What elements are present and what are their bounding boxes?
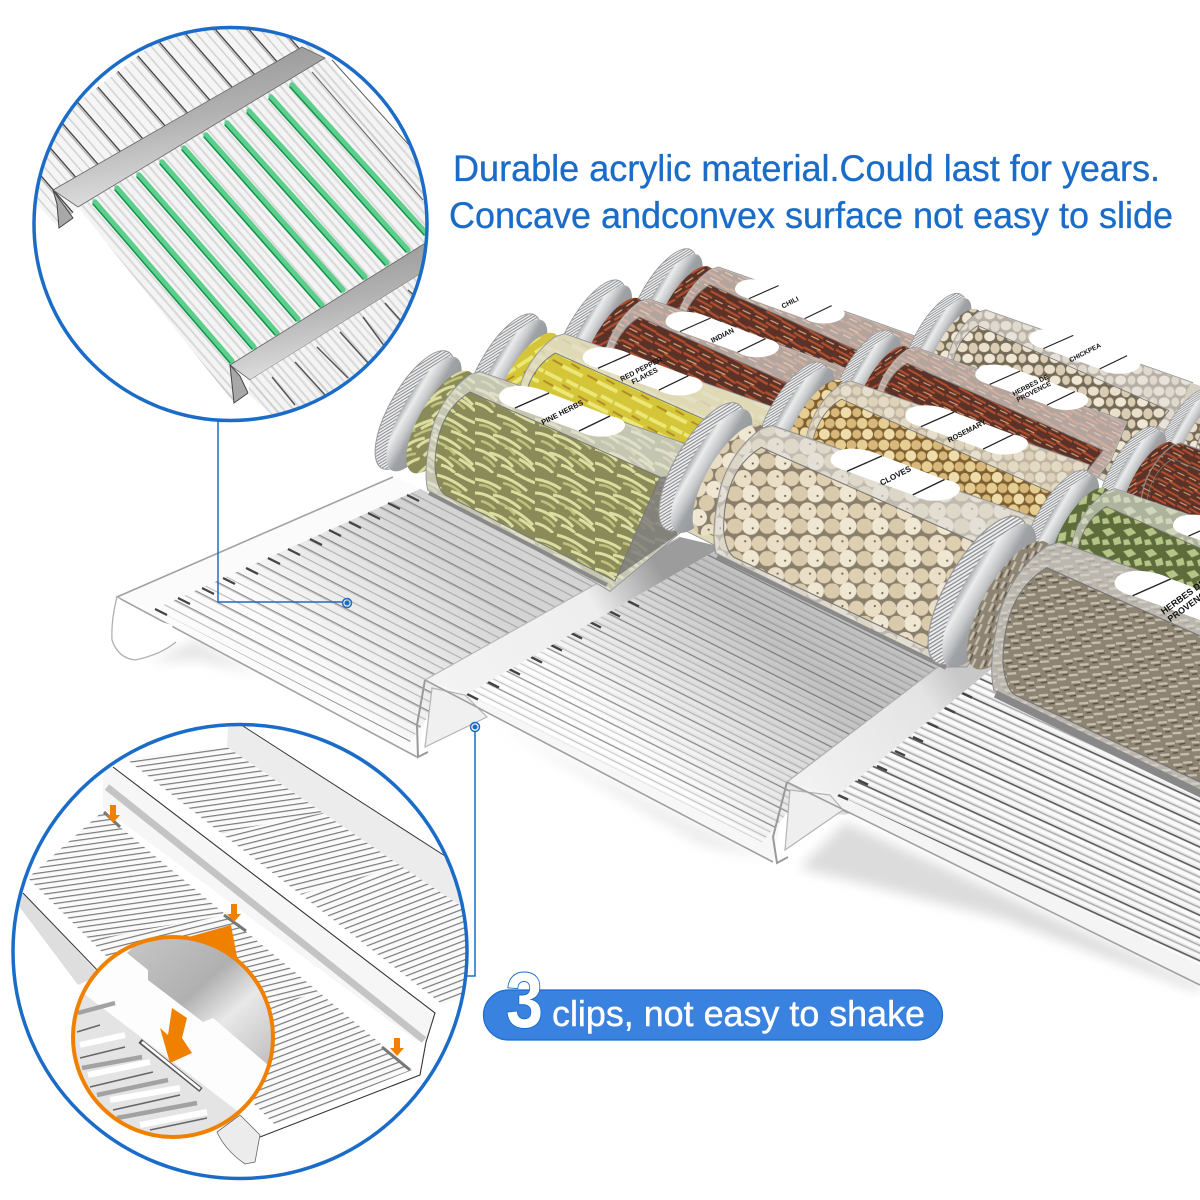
jar: yellow spice: FLAKES [630, 366, 659, 386]
panel: stepped acrylic shelf trays [112, 477, 1200, 992]
tray 1 [112, 477, 720, 757]
jar: white chickpeas back [892, 285, 1200, 484]
callout pill: 3 clips [484, 956, 942, 1044]
jar: chili, back left [614, 239, 949, 461]
pill text: clips, not easy to shake [552, 993, 925, 1034]
jar: pearls front: CLOVES [879, 464, 913, 488]
big orange arrow [160, 1008, 192, 1063]
lower tray left riser [18, 893, 100, 985]
upper tray ribs [125, 747, 323, 833]
jar: white chickpeas back: CHICKPEA [1068, 342, 1102, 364]
orange zoom pointer [185, 925, 238, 962]
central channel [103, 767, 435, 1042]
jar: red flakes [540, 270, 887, 500]
jar: grey seeds front [909, 502, 1200, 823]
small orange arrows [107, 805, 404, 1056]
middle ribbed surface [78, 58, 440, 403]
left grey surface [75, 994, 237, 1135]
jar: yellow spice: RED PEPPER [619, 355, 664, 383]
jar: tan beans: ROSEMARY [946, 417, 988, 444]
lower tray ribs [28, 812, 226, 940]
grey channel [127, 939, 271, 1064]
upper ribbed surface [30, 15, 325, 228]
jar: yellow spice [451, 303, 816, 546]
jar: green herbs [360, 339, 745, 591]
jar: green leaves [1009, 460, 1200, 685]
grey and white rib bars [80, 1035, 207, 1125]
tray 2 [417, 537, 1060, 862]
panel: top magnified callout of ribbed surface [30, 15, 440, 430]
heading line 2: Concave andconvex surface not easy to slide [449, 195, 1173, 236]
tray 3 [773, 650, 1200, 985]
heading: material and surface text [449, 148, 1173, 236]
upper tray riser [227, 726, 470, 910]
green highlighted ribs [93, 85, 426, 363]
channel band 1 [53, 47, 325, 207]
big numeral 3: 3 [506, 956, 543, 1044]
heading line 1: Durable acrylic material.Could last for years. [453, 148, 1160, 189]
jar: red flakes: INDIAN [709, 326, 735, 345]
jar: pearls front [642, 391, 1058, 668]
dark ribs near right edge [312, 60, 427, 200]
lower tray foot [217, 1115, 260, 1164]
jar: star anise: PROVENCE [1016, 380, 1053, 404]
channel band 2 [230, 242, 430, 380]
connector: bottom callout to clip [466, 722, 480, 976]
connector: top callout to tray [218, 419, 352, 608]
jar: tan beans [742, 352, 1089, 582]
lower ribbed surface [248, 275, 418, 414]
top circle outline [34, 28, 427, 420]
jar: chili, back left: CHILI [781, 296, 800, 310]
jar: white back right [1146, 382, 1200, 560]
jar: star anise: HERBES DE [1012, 374, 1050, 398]
panel: spice jars on the trays [360, 239, 1200, 823]
bottom circle outline [13, 724, 467, 1178]
small clip slots [104, 812, 410, 1070]
jar: star anise [819, 321, 1127, 526]
jar: red back right [1087, 418, 1200, 617]
orange detail circle [60, 930, 280, 1140]
soft floor shadows [150, 640, 1200, 992]
slot [140, 1041, 201, 1090]
panel: bottom magnified callout of clips [13, 724, 470, 1178]
jar: green herbs: PINE HERBS [540, 398, 585, 427]
